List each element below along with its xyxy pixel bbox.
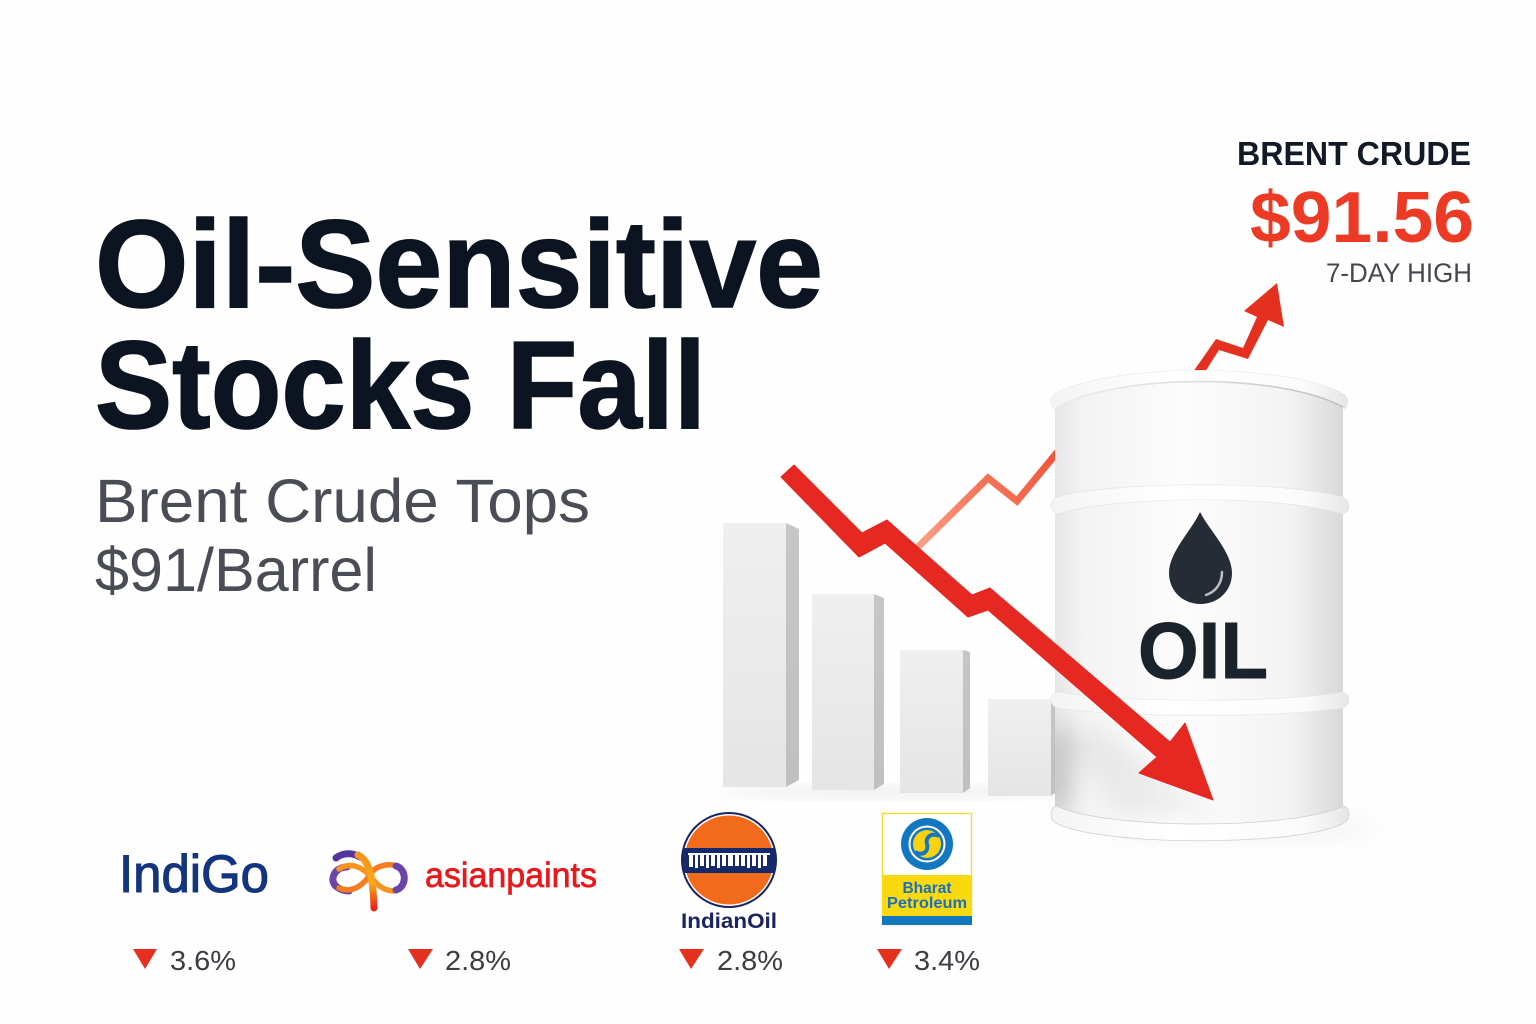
change: Indian Oil bbox=[679, 945, 783, 976]
icon: oil drop bbox=[1169, 512, 1232, 604]
title: Oil-Sensitive bbox=[95, 196, 823, 334]
logo: Asian Paints wordmark: asianpaints bbox=[425, 856, 597, 895]
bar 4 bbox=[988, 699, 1056, 796]
stock: IndiGo bbox=[119, 845, 269, 976]
Brent crude price callout bbox=[1237, 135, 1474, 288]
logo: Asian Paints mark bbox=[333, 854, 404, 908]
barrel label: OIL bbox=[1138, 606, 1268, 695]
stock: Indian Oil bbox=[679, 812, 783, 976]
title: Stocks Fall bbox=[95, 317, 706, 455]
subtitle: $91/Barrel bbox=[95, 536, 377, 604]
change: Asian Paints bbox=[408, 945, 511, 976]
logo: IndiGo: IndiGo bbox=[119, 845, 269, 904]
callout label: BRENT CRUDE bbox=[1237, 135, 1471, 172]
title bbox=[95, 196, 823, 455]
change: IndiGo bbox=[133, 945, 236, 976]
barrel lower band bbox=[1051, 692, 1349, 716]
subtitle: Brent Crude Tops bbox=[95, 467, 590, 535]
barrel lid shadow line bbox=[1056, 382, 1343, 407]
rising orange line behind barrel bbox=[917, 449, 1060, 548]
logo: Bharat Petroleum: Petroleum bbox=[887, 895, 967, 912]
barrel body bbox=[1055, 381, 1343, 832]
bar 2 bbox=[812, 594, 884, 790]
change: Indian Oil: 2.8% bbox=[717, 945, 783, 976]
oil barrel bbox=[1050, 370, 1350, 842]
bar chart: declining white bars bbox=[720, 523, 1060, 797]
change: Bharat Petroleum: 3.4% bbox=[914, 945, 980, 976]
stock: Asian Paints bbox=[333, 854, 597, 976]
change: Asian Paints: 2.8% bbox=[445, 945, 511, 976]
change: IndiGo: 3.6% bbox=[170, 945, 236, 976]
logo: Indian Oil roundel bbox=[681, 812, 777, 908]
callout price: $91.56 bbox=[1250, 178, 1474, 258]
rising red arrow above barrel bbox=[1193, 283, 1284, 372]
callout note: 7-DAY HIGH bbox=[1326, 258, 1472, 288]
barrel upper band bbox=[1051, 485, 1349, 514]
barrel bottom rim bbox=[1051, 806, 1349, 841]
stock: Bharat Petroleum bbox=[877, 814, 980, 976]
subtitle bbox=[95, 467, 590, 604]
logo: Indian Oil wordmark: IndianOil bbox=[681, 910, 777, 933]
logo: Bharat Petroleum: Bharat bbox=[902, 880, 952, 897]
change: Bharat Petroleum bbox=[877, 945, 980, 976]
barrel top rim bbox=[1051, 370, 1348, 409]
bar 1 bbox=[723, 523, 799, 787]
barrel shading bbox=[1055, 723, 1186, 810]
bar 3 bbox=[900, 650, 970, 793]
logo: Bharat Petroleum bbox=[882, 814, 972, 925]
infographic canvas bbox=[96, 142, 1472, 970]
falling red arrow bbox=[781, 465, 1213, 800]
